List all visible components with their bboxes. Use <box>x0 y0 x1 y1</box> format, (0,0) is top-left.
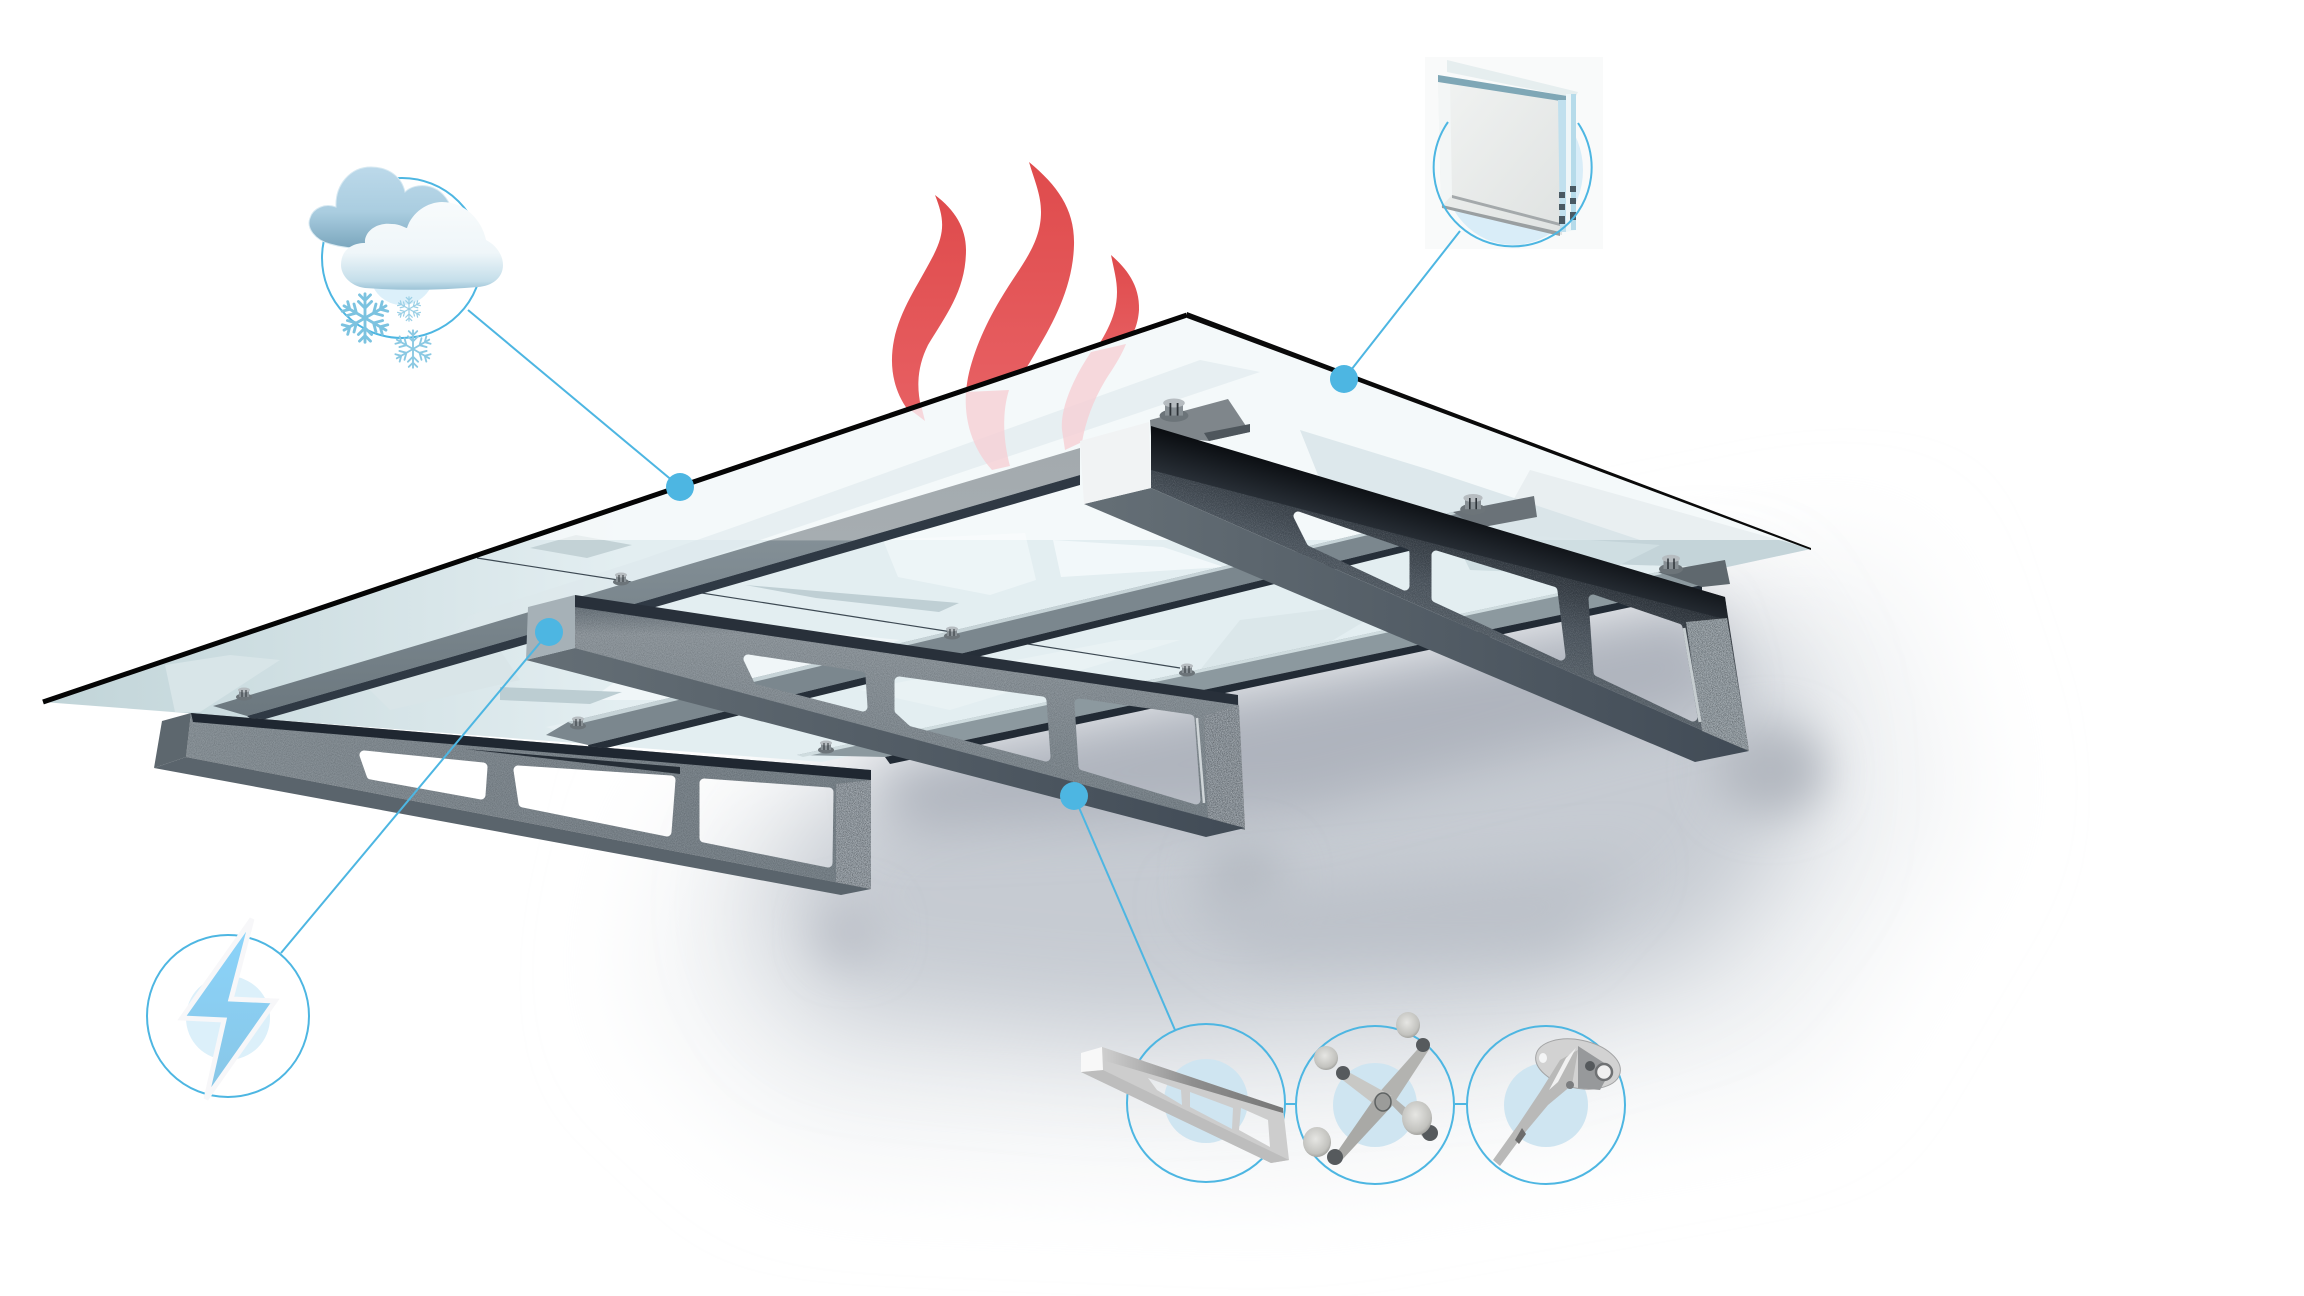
spider arms <box>1376 1042 1430 1106</box>
glass canopy panel <box>0 300 1900 762</box>
bracket wall foot <box>1686 618 1749 751</box>
bracket end face <box>1080 422 1151 504</box>
bracket bottom flange <box>154 757 871 895</box>
callout circle <box>1434 122 1592 246</box>
bracket bottom flange <box>1084 488 1749 762</box>
circle: spider fitting <box>1296 1012 1454 1184</box>
callout: hardware options <box>1060 782 1625 1184</box>
callout circle <box>147 935 309 1097</box>
hole bevel <box>1684 628 1700 722</box>
rail A <box>213 398 1250 722</box>
bracket end <box>154 713 191 768</box>
spider pads <box>1303 1012 1432 1157</box>
bracket web with cut-outs <box>186 713 871 889</box>
rail B screws <box>570 494 1486 730</box>
hole bevel <box>1197 718 1204 803</box>
front cloud <box>341 202 503 290</box>
flame left <box>892 195 966 410</box>
heat flames rising behind glass <box>892 162 1139 410</box>
spider bolts <box>1327 1038 1438 1165</box>
bracket wall foot <box>1204 705 1245 828</box>
leader line <box>281 632 549 953</box>
flame right <box>1091 255 1139 358</box>
callout: glass sample <box>1330 57 1603 393</box>
bracket end face <box>526 595 575 660</box>
rail A end block <box>1150 399 1250 441</box>
laminated glass block <box>1438 60 1578 236</box>
anchor dot <box>666 473 694 501</box>
bracket top flange <box>1151 426 1728 620</box>
rod <box>1493 1050 1578 1166</box>
anchor dot <box>1330 365 1358 393</box>
connector lines <box>1285 1103 1467 1105</box>
rail B <box>546 494 1537 752</box>
pale disc <box>1443 95 1583 245</box>
callout circle <box>322 178 482 338</box>
anchor dot <box>1060 782 1088 810</box>
bracket web with cut-outs <box>575 595 1245 830</box>
faded flame through glass right <box>1062 344 1126 450</box>
lighter glass above seam <box>530 318 1784 540</box>
snowflakes <box>341 294 432 368</box>
glass top edge <box>43 315 1187 702</box>
faded flame through glass middle <box>966 390 1010 470</box>
fitting lug <box>1578 1046 1612 1090</box>
circle: tension rod fitting <box>1467 1026 1625 1184</box>
bracket top flange <box>575 595 1238 705</box>
callout: snow load <box>309 167 694 501</box>
leader line <box>468 310 680 487</box>
callout: lightning <box>147 618 563 1099</box>
bracket web with cut-outs <box>1151 426 1749 751</box>
back cloud <box>309 167 450 248</box>
circle: bracket <box>1081 1024 1289 1182</box>
leader line <box>1344 231 1460 379</box>
glass seam lines <box>477 558 1180 668</box>
inner disc <box>370 241 434 305</box>
leader line <box>1074 796 1175 1030</box>
bracket front left <box>154 713 871 895</box>
rail C screws <box>818 555 1683 754</box>
bracket top flange <box>191 713 871 780</box>
fitting plate <box>1531 1032 1625 1096</box>
sample backdrop <box>1425 57 1603 249</box>
glass reflections <box>165 318 1809 712</box>
faded flame tail left <box>908 405 925 421</box>
anchor dot <box>535 618 563 646</box>
rail A screws <box>236 398 1188 700</box>
flame middle <box>966 162 1074 392</box>
rail C end block <box>1658 560 1730 587</box>
inner disc <box>186 976 270 1060</box>
mini bracket <box>1081 1047 1289 1163</box>
rail C <box>797 555 1730 764</box>
bracket middle <box>526 595 1245 837</box>
wall shadow <box>650 560 1960 1160</box>
bracket bottom flange <box>526 648 1245 837</box>
rail B end block <box>1453 496 1537 528</box>
lightning bolt <box>182 919 275 1099</box>
bracket wall foot <box>836 780 871 889</box>
bracket right <box>1080 422 1749 762</box>
